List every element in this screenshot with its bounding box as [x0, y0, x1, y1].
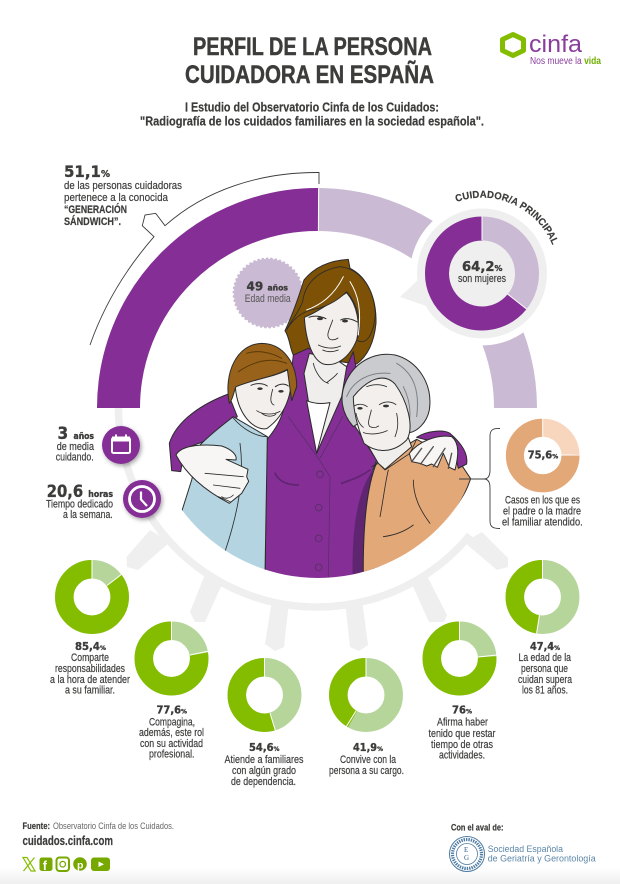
- panel: weekly hours: a la semana.: [63, 509, 113, 521]
- panel: years caring: de media: [57, 441, 94, 453]
- panel: main caregiver donut: 64,2%: [462, 259, 502, 275]
- logo: SEGG seal: de Geriatría y Gerontología: [488, 854, 596, 864]
- woman: left arm behind boy: [169, 394, 237, 472]
- icon: calendar: [102, 426, 140, 464]
- panel: parent attended: el familiar atendido.: [502, 516, 583, 528]
- donut: 41,9%: [329, 658, 404, 777]
- icon: pinterest: p: [77, 860, 83, 872]
- callout: 51,1%: 51,1%: [64, 162, 110, 181]
- icon: youtube: [91, 858, 110, 871]
- callout: 51,1%: pertenece a la conocida: [64, 192, 168, 204]
- donut: 76%: tiempo de otras: [431, 739, 493, 751]
- donut: 77,6%: Compagina,: [149, 716, 195, 728]
- callout: 51,1%: SÁNDWICH”.: [64, 215, 121, 228]
- donut: 76%: [428, 621, 497, 762]
- logo: SEGG seal: [450, 836, 596, 872]
- woman: hair front strand: [287, 267, 375, 342]
- donut: 54,6%: con algún grado: [232, 765, 296, 777]
- boy: hair: [228, 343, 297, 403]
- big arc: share of sandwich generation: [118, 209, 515, 408]
- donut: 77,6%: profesional.: [149, 749, 194, 761]
- subtitle: I Estudio del Observatorio Cinfa de los Cuidados:: [185, 100, 439, 114]
- source note: [22, 821, 174, 832]
- elderly: facial features: [354, 385, 398, 437]
- logo: SEGG seal: E: [464, 846, 468, 854]
- curved heading: cuidador/a principal: CUIDADOR/A PRINCIPAL: [455, 190, 558, 245]
- donut: 54,6%: 54,6%: [249, 742, 280, 754]
- donut: 85,4%: Comparte: [71, 652, 109, 664]
- source note: Observatorio Cinfa de los Cuidados.: [53, 821, 174, 832]
- donut: 85,4%: a la hora de atender: [50, 674, 130, 686]
- panel: weekly hours: Tiempo dedicado: [46, 499, 113, 511]
- panel: years caring: [56, 424, 140, 464]
- source note: Fuente:: [22, 821, 50, 832]
- donut: 41,9%: persona a su cargo.: [329, 765, 404, 777]
- donut: 85,4%: a su familiar.: [65, 684, 115, 696]
- panel: years caring: cuidando.: [56, 452, 94, 464]
- panel: parent attended: Casos en los que es: [505, 495, 580, 507]
- elderly: face: [353, 378, 410, 450]
- boy: sweater: [182, 417, 267, 573]
- boy: face: [235, 368, 291, 429]
- callout: 51,1%: “GENERACIÓN: [64, 203, 127, 216]
- logo: cinfa: cinfa: [529, 31, 583, 58]
- icon: facebook: f: [43, 859, 48, 873]
- panel: main caregiver donut: [400, 202, 554, 346]
- panel: weekly hours: [46, 480, 161, 521]
- arrow: curved outline arrow: [90, 172, 319, 345]
- callout: 51,1%: [64, 162, 183, 228]
- donut: 77,6%: con su actividad: [140, 738, 203, 750]
- title: PERFIL DE LA PERSONA: [193, 33, 432, 61]
- woman: hair: [285, 259, 376, 364]
- woman: sleeve shade: [353, 470, 380, 580]
- donut: 76%: 76%: [452, 705, 473, 717]
- boy: collar and sleeve seam: [225, 417, 267, 552]
- donut: 76%: actividades.: [439, 750, 485, 762]
- logo: cinfa: [502, 31, 601, 67]
- woman: body: [265, 348, 377, 580]
- donut: 47,4%: La edad de la: [518, 652, 571, 664]
- donut: 47,4%: persona que: [521, 663, 568, 675]
- donut: 41,9%: Convive con la: [340, 754, 396, 766]
- panel: parent attended: el padre o la madre: [503, 506, 581, 518]
- panel: weekly hours: 20,6 horas: [47, 482, 113, 502]
- donut: 77,6%: 77,6%: [156, 705, 188, 717]
- callout: 51,1%: de las personas cuidadoras: [64, 180, 183, 192]
- icon: instagram: [56, 858, 69, 871]
- elderly: neck: [369, 437, 412, 470]
- donut: 54,6%: [224, 658, 304, 788]
- boy: hand of woman: [176, 445, 249, 503]
- donut: 85,4%: [50, 560, 130, 696]
- woman: jacket seams and buttons: [275, 417, 370, 580]
- woman: right hand on shoulder: [417, 431, 467, 468]
- illustration: family embrace: [169, 259, 471, 580]
- badge: average age: [234, 259, 302, 327]
- panel: parent attended: 75,6%: [528, 450, 559, 462]
- woman: neck and blouse: [304, 353, 347, 453]
- donut: 85,4%: responsabilidades: [55, 663, 125, 675]
- grey ring with spokes: [118, 408, 508, 651]
- panel: years caring: 3 años: [58, 424, 94, 444]
- logo: SEGG seal: Sociedad Española: [488, 844, 563, 854]
- woman: white top: [307, 401, 330, 453]
- logo: cinfa: Nos mueve la vida: [530, 56, 601, 67]
- donut: 76%: tenido que restar: [428, 728, 496, 740]
- donut: 85,4%: 85,4%: [75, 641, 107, 653]
- endorsement label: Con el aval de:: [451, 823, 504, 834]
- panel: parent attended: [459, 418, 583, 528]
- subtitle: [140, 100, 484, 128]
- title: [185, 33, 434, 89]
- social icons: [23, 857, 110, 873]
- donut: 77,6%: [139, 621, 209, 761]
- website: cuidados.cinfa.com: [22, 834, 113, 848]
- icon: X: [23, 858, 35, 871]
- donut: 76%: Afirma haber: [437, 716, 488, 728]
- boy: facial features: [251, 384, 288, 416]
- icon: clock: [123, 480, 161, 518]
- woman: face: [304, 293, 358, 365]
- donut: 47,4%: los 81 años.: [522, 684, 568, 696]
- elderly: hair: [342, 354, 430, 433]
- donut: 47,4%: cuidan supera: [518, 674, 572, 686]
- woman: facial features: [309, 316, 357, 383]
- donut: 54,6%: Atiende a familiares: [224, 754, 304, 766]
- donut: 41,9%: 41,9%: [353, 742, 384, 754]
- subtitle: "Radiografía de los cuidados familiares en la sociedad española".: [140, 114, 484, 128]
- donut: 47,4%: 47,4%: [530, 641, 561, 653]
- badge: average age: Edad media: [245, 293, 291, 305]
- donut: 47,4%: [515, 560, 572, 696]
- badge: average age: 49 años: [246, 279, 288, 294]
- donut: 77,6%: además, este rol: [139, 727, 204, 739]
- logo: SEGG seal: G: [464, 854, 469, 862]
- donut: 54,6%: de dependencia.: [231, 776, 296, 788]
- title: CUIDADORA EN ESPAÑA: [185, 59, 434, 89]
- panel: main caregiver donut: son mujeres: [458, 273, 506, 285]
- elderly: collar and folds: [372, 439, 430, 537]
- elderly: sweater: [363, 439, 471, 580]
